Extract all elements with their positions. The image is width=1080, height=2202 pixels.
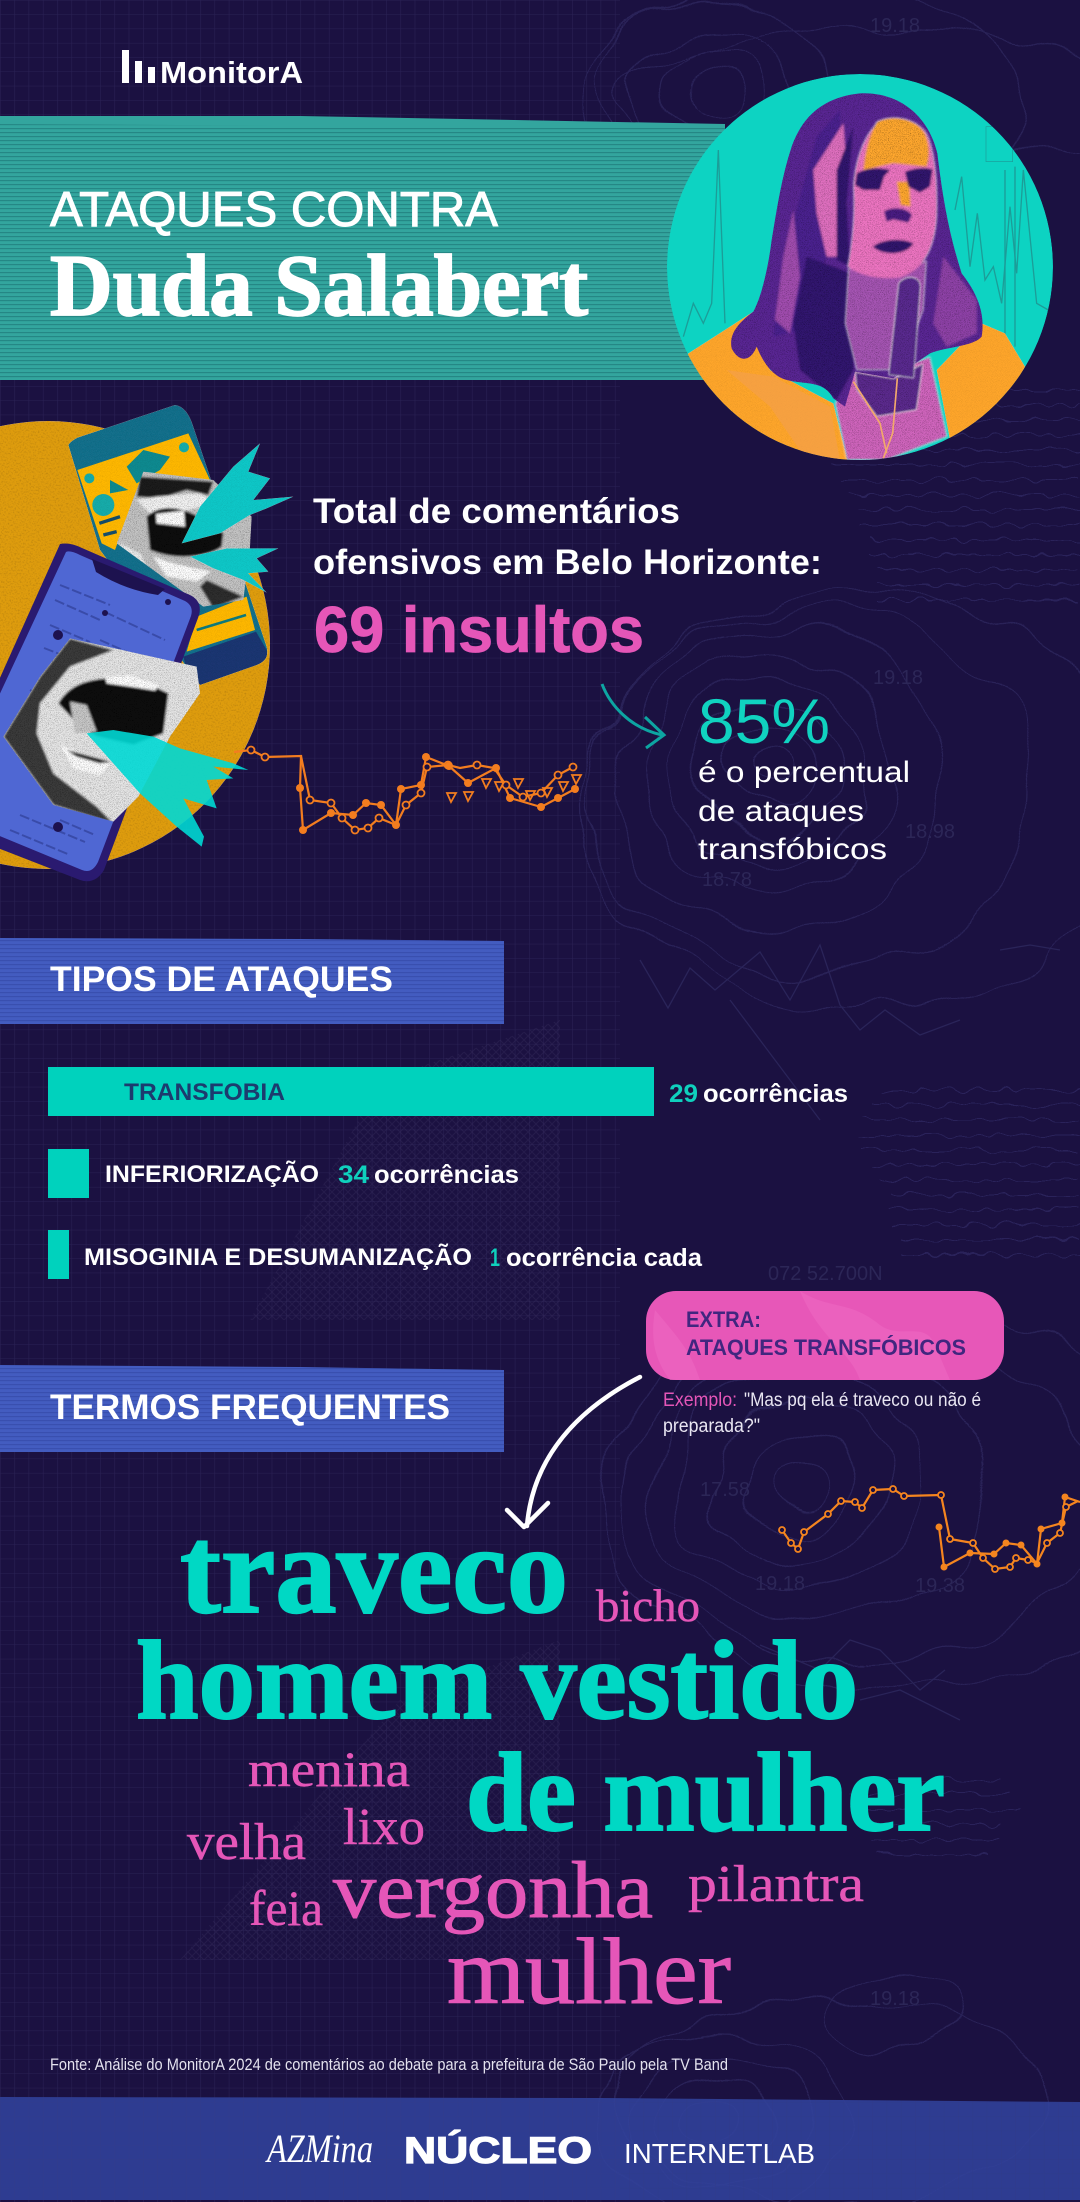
text block: example: preparada?" xyxy=(663,1416,760,1437)
stat: 85 percent: transfóbicos xyxy=(698,833,887,866)
arrow: teal xyxy=(602,684,664,748)
source note: Fonte: Análise do MonitorA 2024 de comentários ao debate para a prefeitura de São Paulo pela TV Band xyxy=(50,2055,728,2074)
text: 19.18 xyxy=(873,667,923,689)
bar: transfobia: TRANSFOBIA xyxy=(124,1079,285,1106)
word cloud: frequent terms: traveco xyxy=(180,1502,568,1640)
phone: twitter screen xyxy=(68,405,267,685)
text block: example xyxy=(663,1390,981,1437)
word cloud: frequent terms xyxy=(136,1502,945,2024)
word cloud: frequent terms: lixo xyxy=(343,1799,425,1856)
text: 18.78 xyxy=(702,869,752,891)
text: 072 52.700N xyxy=(768,1263,883,1285)
word cloud: frequent terms: mulher xyxy=(447,1920,731,2024)
phone: blue feed screen xyxy=(0,544,200,881)
hair xyxy=(727,90,987,410)
brush: teal lower xyxy=(87,730,248,847)
stat: 85 percent: 85% xyxy=(698,687,830,757)
heading: Duda Salabert: Duda Salabert xyxy=(50,238,588,335)
text block: total comments xyxy=(313,492,822,666)
section heading: tipos de ataques: TIPOS DE ATAQUES xyxy=(50,960,393,999)
heading: ataques contra: ATAQUES CONTRA xyxy=(50,183,498,237)
word cloud: frequent terms: velha xyxy=(187,1814,306,1871)
word cloud: frequent terms: de mulher xyxy=(466,1731,945,1855)
logo: InternetLab: INTERNETLAB xyxy=(624,2138,815,2169)
brush: teal upper xyxy=(182,443,293,593)
callout: extra transphobic attacks xyxy=(646,1291,1004,1380)
bar: misoginia e desumanizacao: MISOGINIA E DESUMANIZAÇÃO xyxy=(84,1243,472,1271)
face xyxy=(845,118,937,370)
bar: inferiorizacao xyxy=(48,1149,519,1198)
text: 17.58 xyxy=(700,1479,750,1501)
necklace and microphone stand xyxy=(853,378,897,458)
word cloud: frequent terms: menina xyxy=(248,1741,410,1797)
line chart: orange upper xyxy=(234,746,581,834)
mouth: lower xyxy=(0,633,203,827)
word cloud: frequent terms: feia xyxy=(249,1880,323,1936)
text block: total comments: ofensivos em Belo Horizonte: xyxy=(313,543,822,582)
mouth: upper xyxy=(116,472,252,606)
word cloud: frequent terms: pilantra xyxy=(688,1856,864,1913)
bar chart: attack types xyxy=(48,1067,848,1279)
stat: 69 insultos: 69 insultos xyxy=(314,593,644,666)
microphone xyxy=(888,277,921,378)
text: 19.38 xyxy=(915,1575,965,1597)
footer band with partner logos xyxy=(0,2097,1080,2200)
section heading: termos frequentes xyxy=(0,1365,504,1452)
section heading: tipos de ataques xyxy=(0,938,504,1024)
text block: example: "Mas pq ela é traveco ou não é xyxy=(744,1390,981,1411)
text: 19.18 xyxy=(755,1573,805,1595)
bar: misoginia e desumanizacao: 1 xyxy=(490,1244,500,1272)
logo: MonitorA xyxy=(122,50,303,90)
bar: transfobia: ocorrências xyxy=(703,1080,848,1108)
header band: title xyxy=(0,116,725,380)
jacket xyxy=(680,312,848,467)
line chart: orange lower xyxy=(779,1486,1080,1572)
text: 19.18 xyxy=(870,15,920,37)
callout: extra transphobic attacks: ATAQUES TRANSFÓBICOS xyxy=(686,1335,966,1360)
logo: MonitorA: MonitorA xyxy=(160,55,303,90)
stat: 85 percent xyxy=(698,687,910,866)
bar: inferiorizacao: ocorrências xyxy=(374,1161,519,1189)
bar: misoginia e desumanizacao xyxy=(48,1230,703,1279)
bar: inferiorizacao: INFERIORIZAÇÃO xyxy=(105,1160,319,1188)
logo: AzMina: AZMina xyxy=(265,2126,373,2171)
portrait: Duda Salabert xyxy=(667,74,1053,467)
text block: example: Exemplo: xyxy=(663,1390,737,1411)
word cloud: frequent terms: bicho xyxy=(596,1580,700,1631)
yellow circle xyxy=(0,421,270,869)
chest xyxy=(835,357,947,460)
section heading: termos frequentes: TERMOS FREQUENTES xyxy=(50,1388,450,1427)
text: 18.98 xyxy=(905,821,955,843)
text block: total comments: Total de comentários xyxy=(313,492,680,531)
callout: extra transphobic attacks: EXTRA: xyxy=(686,1307,761,1332)
word cloud: frequent terms: homem vestido xyxy=(136,1619,858,1743)
illustration: phones and shouting mouths xyxy=(0,405,293,881)
logo: Nucleo: NÚCLEO xyxy=(404,2129,592,2171)
bar: transfobia xyxy=(48,1067,848,1116)
bar: inferiorizacao: 34 xyxy=(338,1161,369,1189)
bar: transfobia: 29 xyxy=(669,1080,698,1108)
arrow: white curved xyxy=(507,1377,640,1527)
text: 19.18 xyxy=(870,1988,920,2010)
stat: 85 percent: é o percentual xyxy=(698,756,910,789)
bar: misoginia e desumanizacao: ocorrência cada xyxy=(506,1244,703,1272)
stat: 85 percent: de ataques xyxy=(698,795,864,828)
word cloud: frequent terms: vergonha xyxy=(333,1847,653,1935)
